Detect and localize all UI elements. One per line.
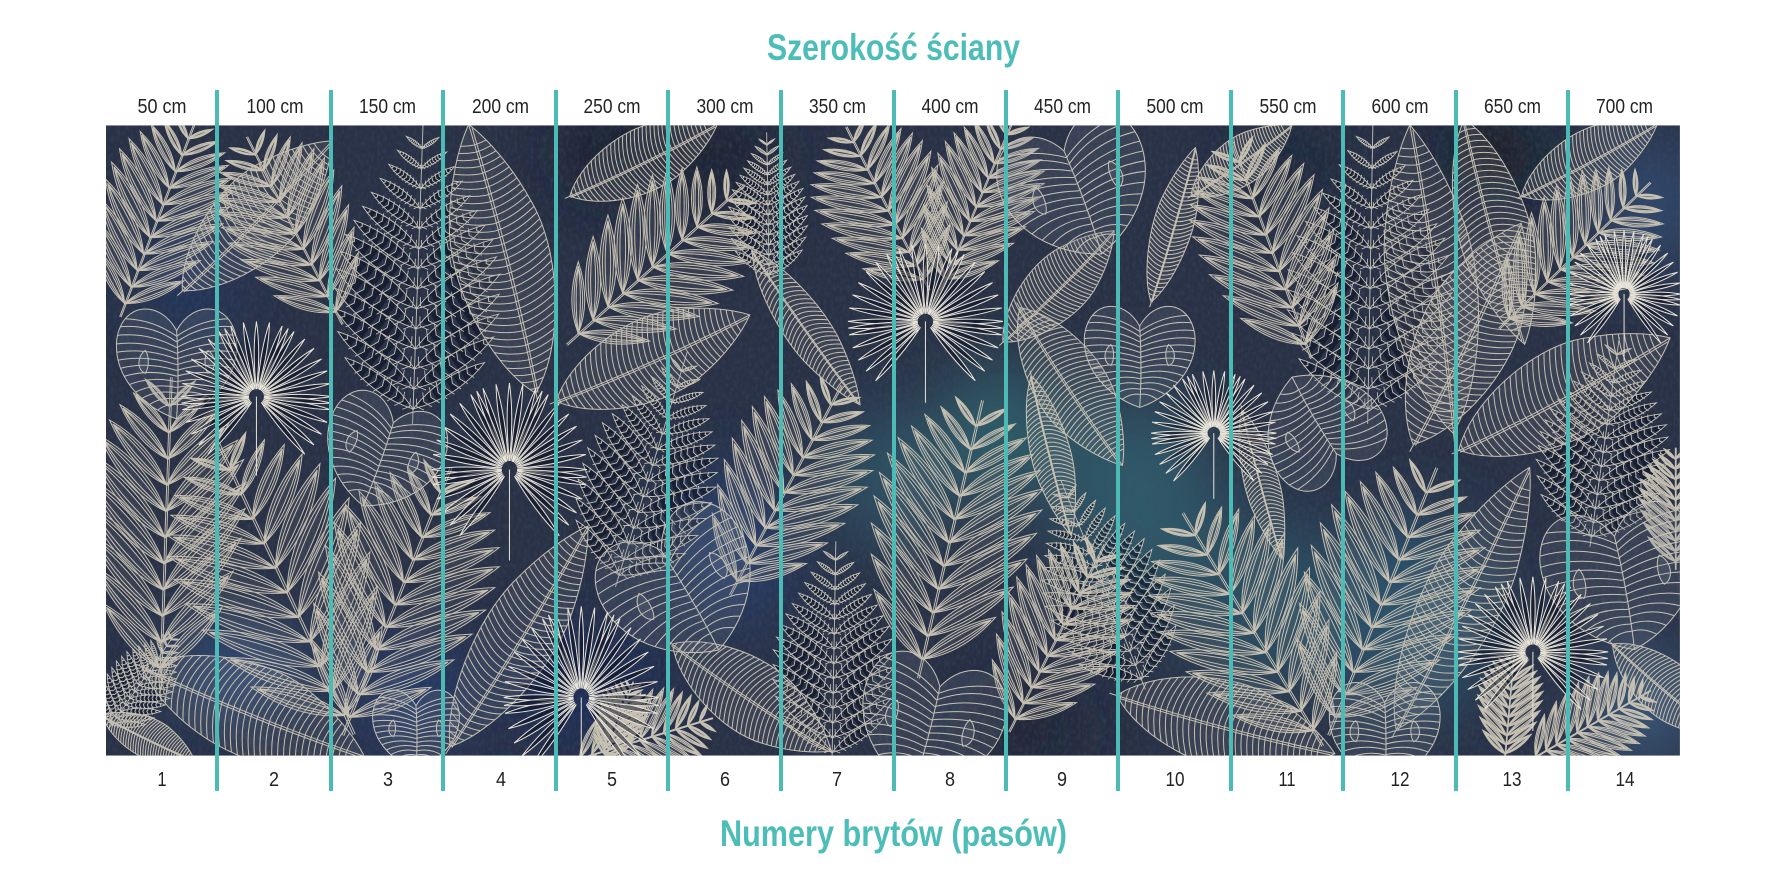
strip number labels: 1 bbox=[158, 769, 166, 791]
width scale labels: 600 cm bbox=[1372, 96, 1428, 118]
width scale labels: 250 cm bbox=[584, 96, 640, 118]
width scale labels: 400 cm bbox=[922, 96, 978, 118]
strip number labels: 2 bbox=[269, 769, 279, 791]
width scale labels: 100 cm bbox=[246, 96, 304, 118]
width scale labels: 550 cm bbox=[1260, 96, 1316, 118]
width scale labels bbox=[138, 96, 1653, 118]
foliage: banana leaves bbox=[106, 125, 1680, 756]
foliage: monstera leaves bbox=[116, 125, 1680, 756]
panel: tropical leaf mural bbox=[106, 125, 1680, 756]
width scale labels: 500 cm bbox=[1146, 96, 1204, 118]
foliage: palm fronds bbox=[106, 125, 1680, 756]
strip number labels: 7 bbox=[832, 769, 842, 791]
foliage: fan palms bbox=[181, 230, 1681, 793]
width scale labels: 450 cm bbox=[1034, 96, 1091, 118]
width scale labels: 150 cm bbox=[359, 96, 416, 118]
strip number labels: 3 bbox=[383, 769, 393, 791]
strip number labels: 6 bbox=[720, 769, 730, 791]
mural background wash bbox=[106, 114, 1698, 764]
width scale labels: 200 cm bbox=[472, 96, 529, 118]
width scale labels: 350 cm bbox=[809, 96, 866, 118]
footer title: strip numbers: Numery brytów (pasów) bbox=[720, 813, 1067, 854]
width scale labels: 700 cm bbox=[1596, 96, 1653, 118]
width scale labels: 650 cm bbox=[1484, 96, 1541, 118]
strip number labels: 9 bbox=[1057, 769, 1067, 791]
strip number labels: 12 bbox=[1390, 769, 1410, 791]
title: wall width: Szerokość ściany bbox=[767, 27, 1020, 68]
foliage: ferns bbox=[79, 120, 1690, 765]
width scale labels: 300 cm bbox=[696, 96, 754, 118]
strip number labels: 14 bbox=[1616, 769, 1634, 791]
strip number labels bbox=[158, 769, 1634, 791]
strip number labels: 13 bbox=[1502, 769, 1522, 791]
strip number labels: 8 bbox=[945, 769, 955, 791]
strip number labels: 5 bbox=[607, 769, 617, 791]
strip number labels: 11 bbox=[1278, 769, 1296, 791]
width scale labels: 50 cm bbox=[138, 96, 186, 118]
strip dividers bbox=[215, 90, 1570, 791]
strip number labels: 10 bbox=[1166, 769, 1184, 791]
strip number labels: 4 bbox=[496, 769, 506, 791]
